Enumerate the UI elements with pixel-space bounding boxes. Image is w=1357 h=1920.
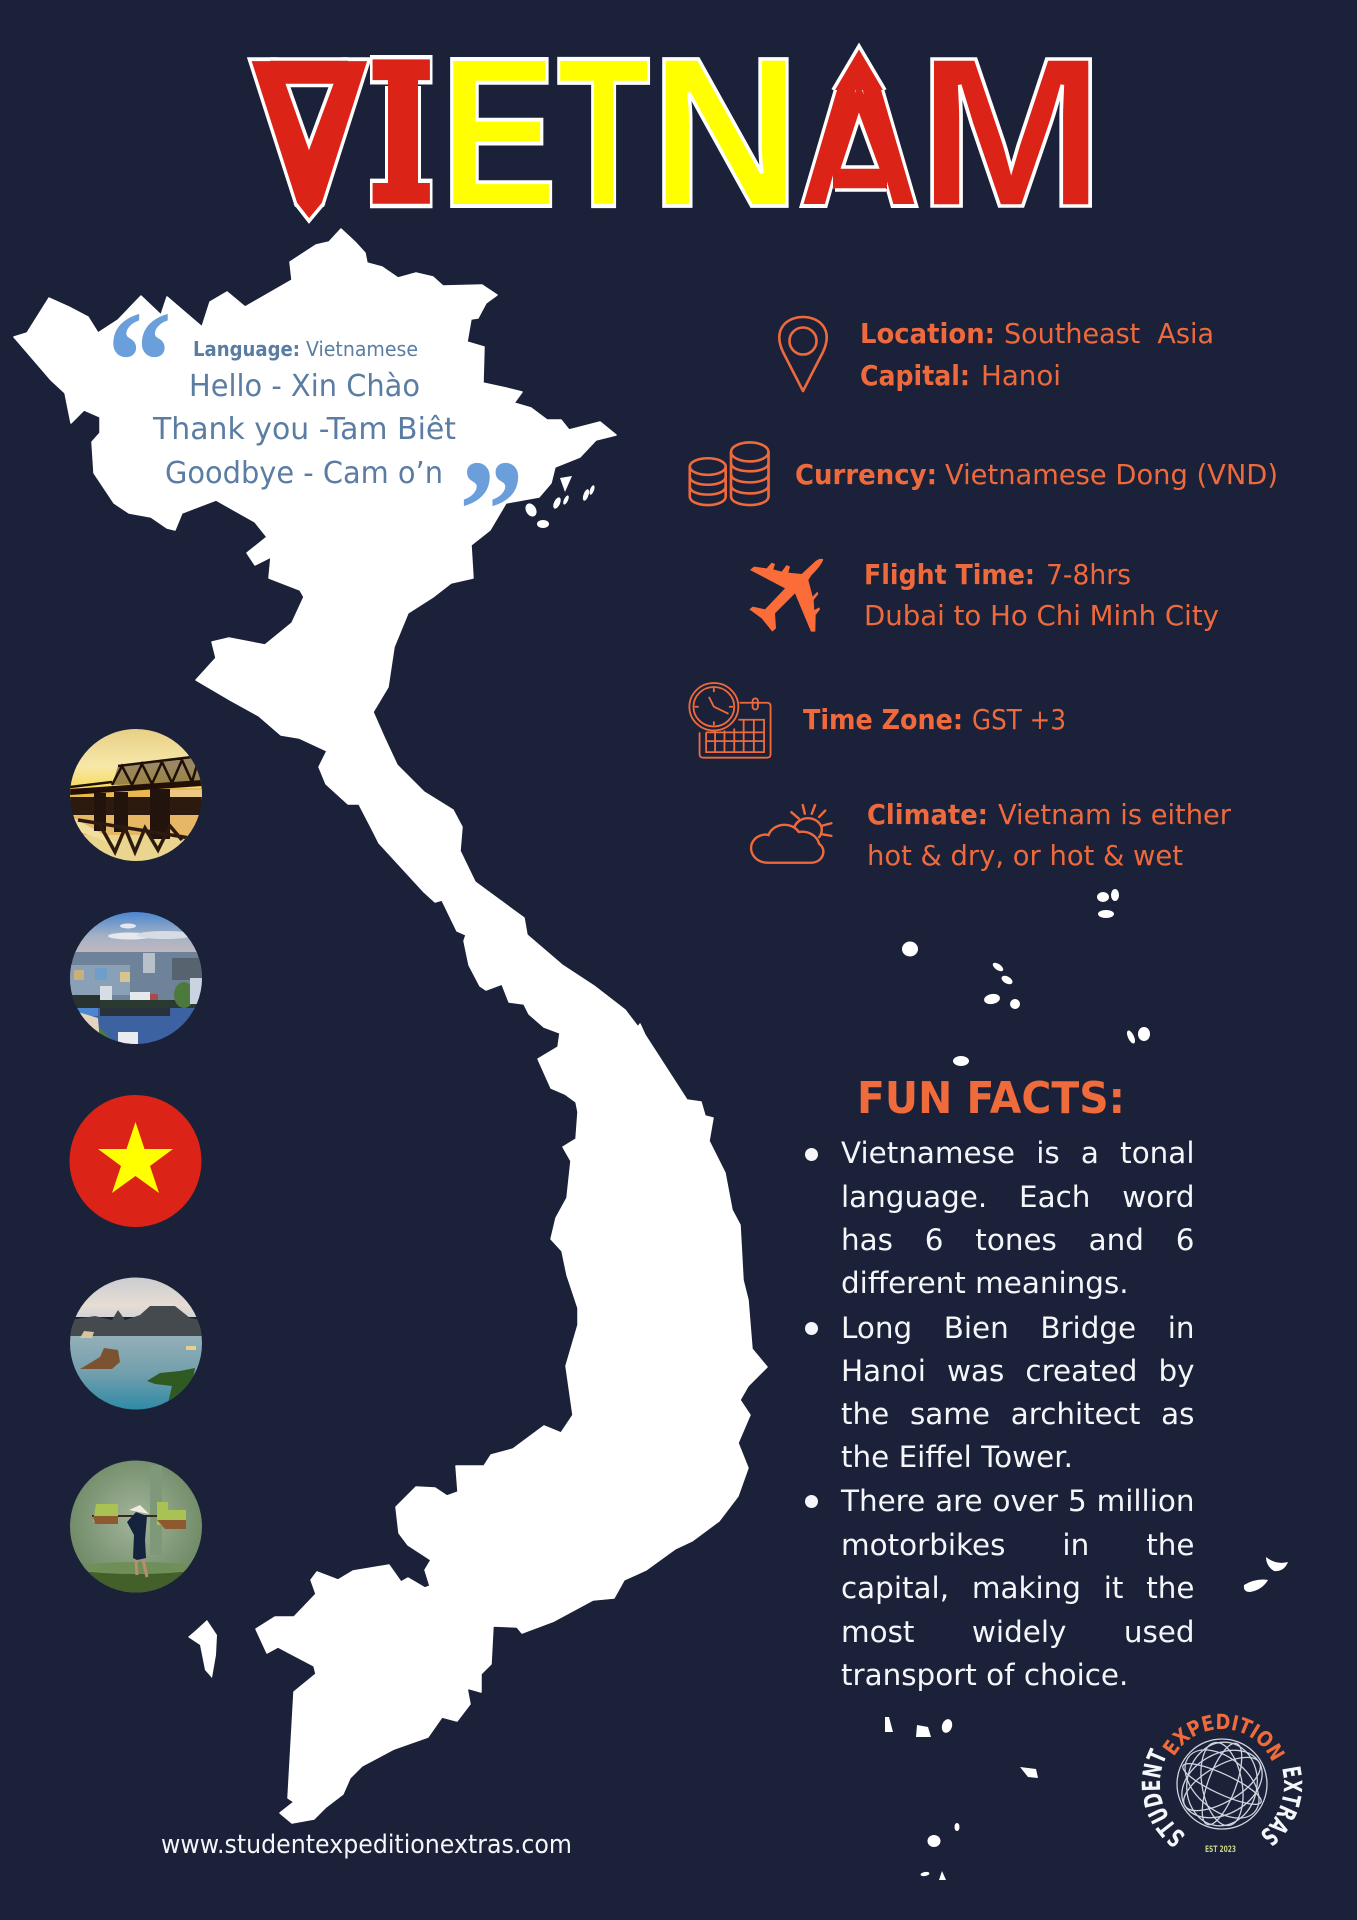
fun facts list: the Eiffel Tower.: [841, 1440, 1073, 1474]
logo text: extras: EXTRAS: [1262, 1766, 1302, 1846]
fun facts list: most widely used: [841, 1615, 1194, 1649]
info: climate: [751, 798, 1231, 872]
currency text: [795, 458, 1278, 491]
fun facts list: Long Bien Bridge in: [841, 1311, 1194, 1345]
location text: Location:: [860, 317, 995, 350]
title text: M: [917, 13, 1105, 252]
farmer pole: [92, 1515, 157, 1517]
icon: clock and calendar: [689, 683, 771, 758]
closing quote mark: ”: [459, 430, 524, 589]
title text: N: [650, 13, 801, 251]
logo text: established: EST 2023: [1205, 1845, 1236, 1855]
fun facts list: Vietnamese is a tonal: [841, 1136, 1194, 1170]
capital text: Capital:: [860, 359, 970, 392]
phrase: thank you: Thank you -Tam Biêt: [152, 412, 456, 447]
islands: [188, 476, 1288, 1880]
logo text: student: STUDENT: [1142, 1748, 1185, 1847]
phrase: goodbye: Goodbye - Cam o’n: [165, 456, 443, 491]
time zone text: Time Zone:: [803, 703, 963, 736]
phrase: hello: Hello - Xin Chào: [189, 369, 420, 404]
heading: fun facts: FUN FACTS:: [857, 1073, 1125, 1124]
flight text line 1: Flight Time:: [864, 558, 1035, 591]
logo: [1142, 1714, 1302, 1855]
climate text line 1: Vietnam is either: [998, 798, 1231, 831]
title text: T: [557, 14, 650, 252]
title text: A: [797, 13, 921, 252]
currency text: Vietnamese Dong (VND): [945, 458, 1278, 491]
title text: E: [440, 14, 557, 252]
photo: rice farmer: [69, 1460, 203, 1596]
capital text: [860, 359, 1061, 392]
climate text line 2: hot & dry, or hot & wet: [867, 839, 1183, 872]
website url: www.studentexpeditionextras.com: [161, 1830, 572, 1860]
climate text line 1: [867, 798, 1231, 831]
fun facts list: transport of choice.: [841, 1658, 1128, 1692]
info: currency: [690, 442, 1278, 505]
flight text line 2: Dubai to Ho Chi Minh City: [864, 599, 1219, 632]
photo: Ha Long Bay: [70, 1277, 202, 1410]
info: flight time: [749, 558, 1219, 632]
icon: coin stacks: [690, 442, 769, 505]
opening quote mark: “: [107, 281, 172, 440]
title accent: top bar and inset closing the V: [266, 59, 352, 192]
climate text line 1: Climate:: [867, 798, 988, 831]
fun facts list: the same architect as: [841, 1397, 1194, 1431]
fun facts list: There are over 5 million: [841, 1484, 1194, 1518]
fun facts list: Hanoi was created by: [841, 1354, 1194, 1388]
title accent: A apex and inset: [823, 46, 895, 190]
title: [248, 13, 1105, 274]
icon: map pin: [779, 317, 827, 391]
title accent: I stem thickening: [385, 70, 421, 195]
time zone text: [803, 703, 1066, 736]
title text: V: [248, 14, 371, 251]
language label: Language:: [193, 337, 300, 361]
photo: Long Bien Bridge: [70, 729, 202, 861]
language label: [193, 337, 418, 361]
icon: cloud and sun: [751, 805, 831, 863]
flag star: [98, 1122, 173, 1193]
photo: Hanoi city: [70, 912, 202, 1044]
location text: Southeast Asia: [1004, 317, 1214, 350]
time zone text: GST +3: [972, 703, 1066, 736]
info: location and capital: [779, 317, 1214, 392]
capital text: Hanoi: [981, 359, 1061, 392]
fun facts list: language. Each word: [841, 1180, 1194, 1214]
title text: [248, 13, 1105, 274]
icon: wire globe: [1170, 1736, 1274, 1832]
currency text: Currency:: [795, 458, 937, 491]
location text: [860, 317, 1214, 350]
fun facts list: motorbikes in the: [841, 1528, 1194, 1562]
fun facts list: [805, 1136, 1194, 1692]
language phrases panel: [107, 281, 524, 589]
logo text: expedition: EXPEDITION: [1162, 1714, 1286, 1761]
fun facts list: capital, making it the: [841, 1571, 1194, 1605]
title text: I: [361, 17, 441, 274]
language label: Vietnamese: [306, 337, 418, 361]
icon: airplane: [749, 559, 823, 632]
photo: Vietnamese flag: [70, 1095, 202, 1227]
fun facts list: has 6 tones and 6: [841, 1223, 1194, 1257]
fun facts list: different meanings.: [841, 1266, 1129, 1300]
title accent: V point: [295, 203, 324, 221]
flight text line 1: 7-8hrs: [1046, 558, 1131, 591]
info: time zone: [689, 683, 1066, 758]
